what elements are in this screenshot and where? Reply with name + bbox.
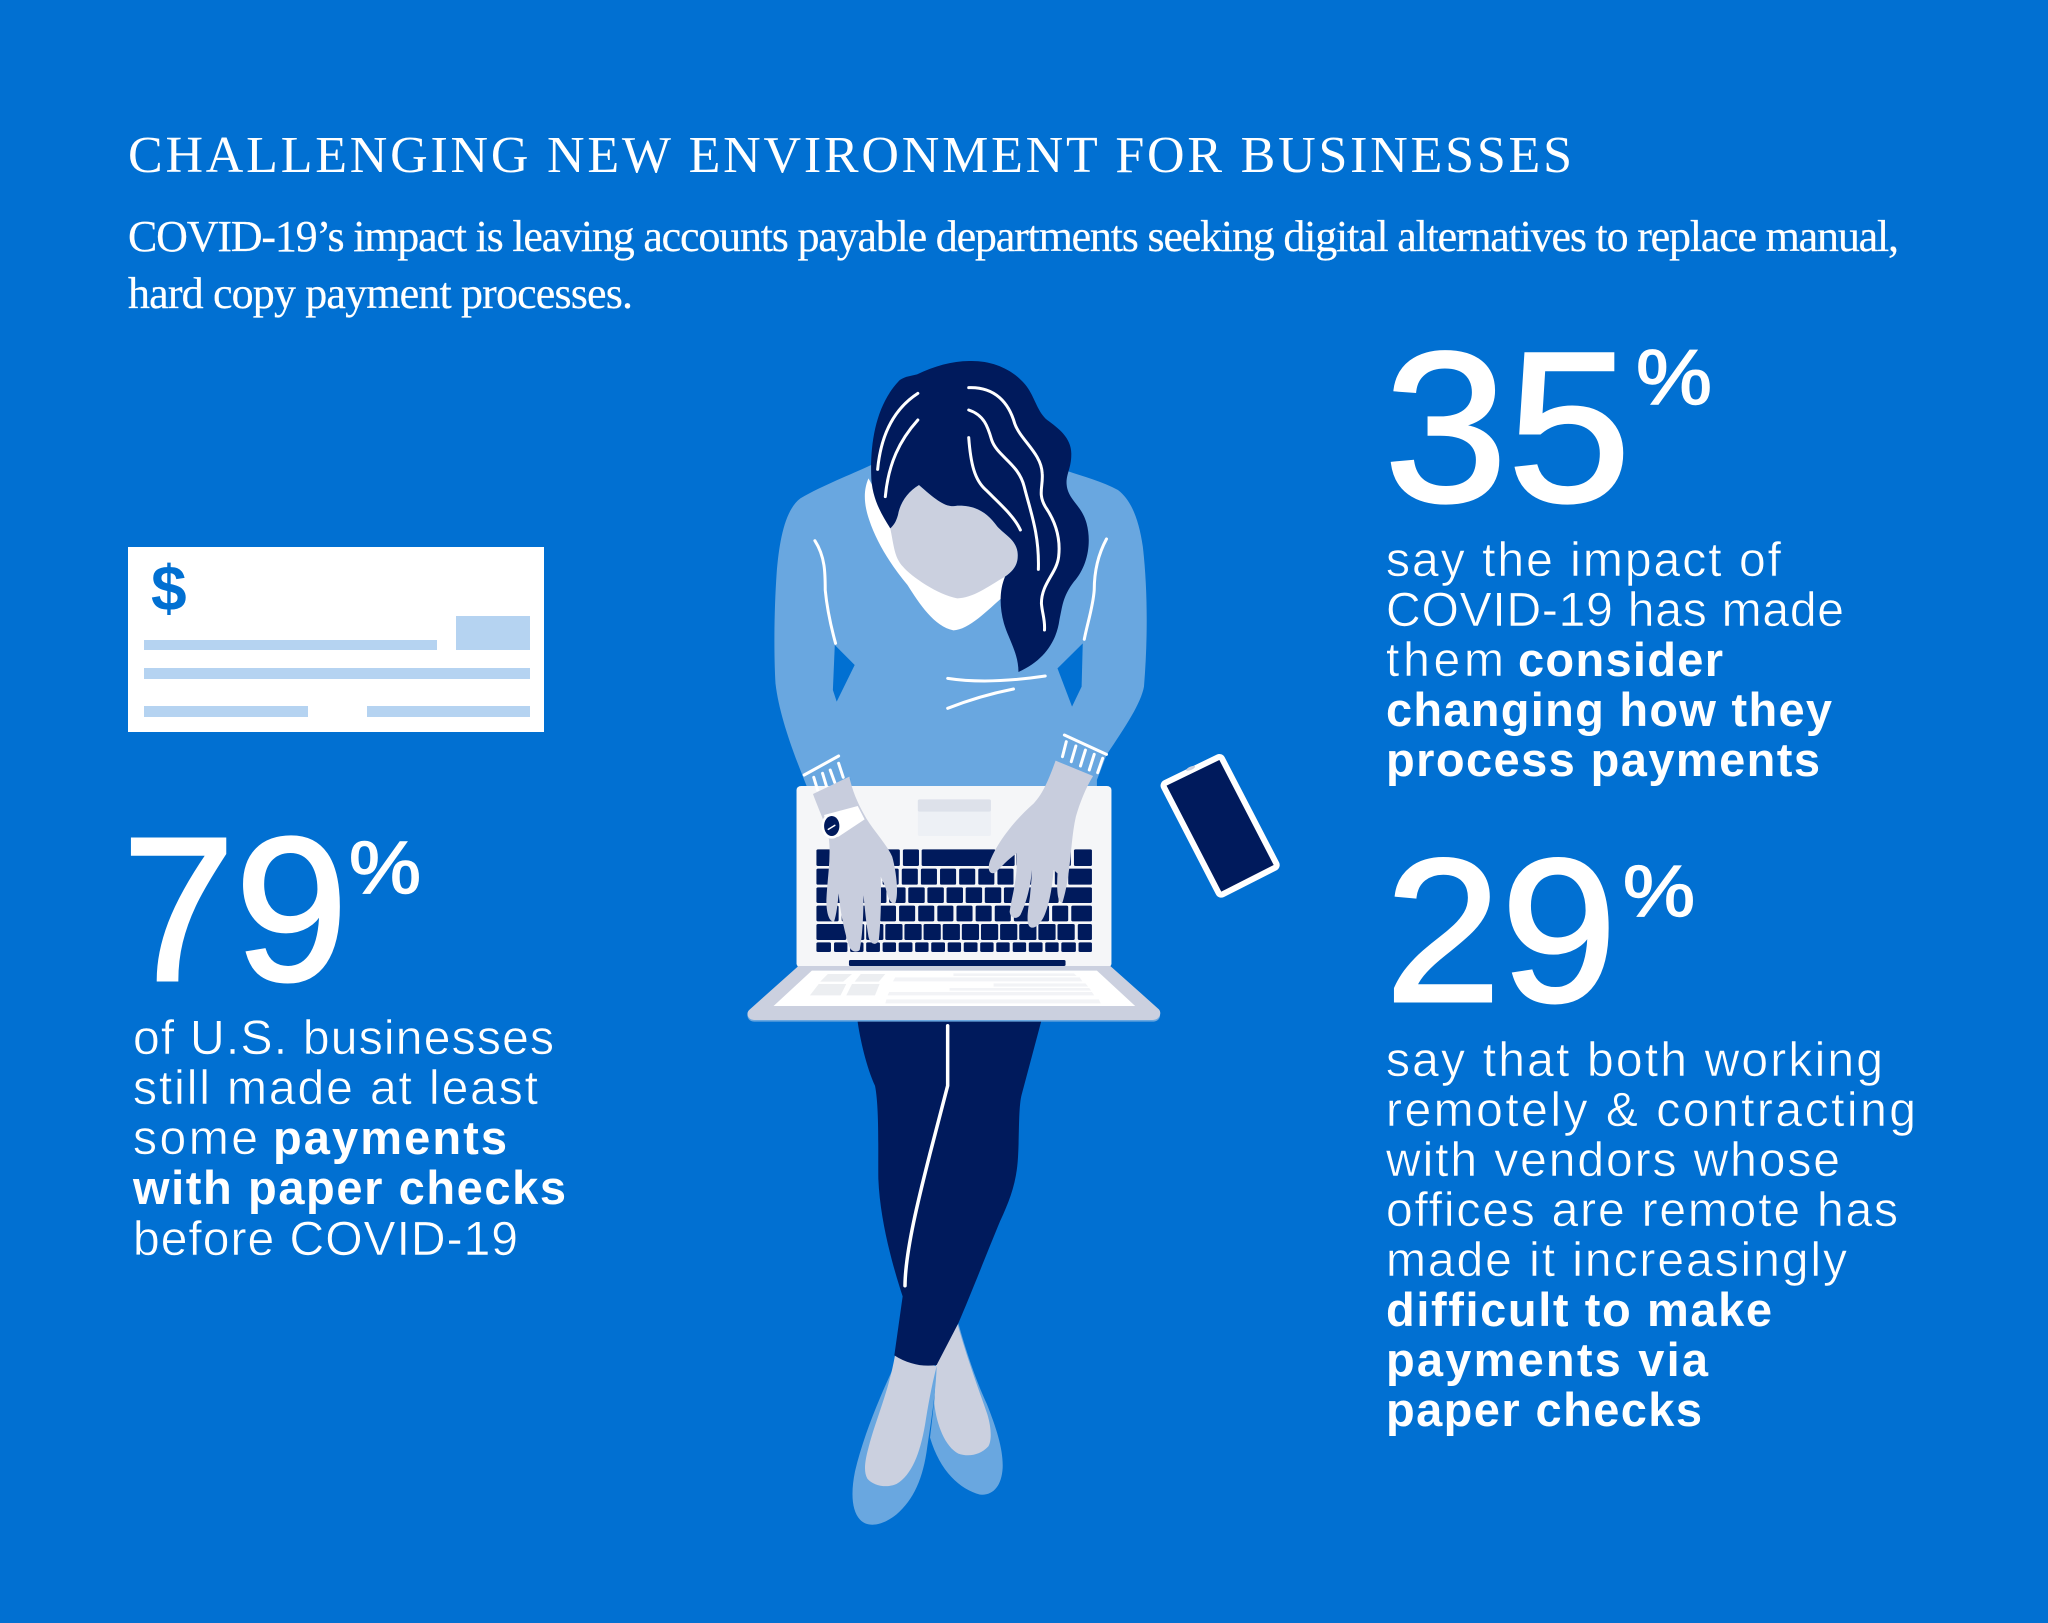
text: 35 percent description: them [1386,634,1504,687]
text: 29 percent description: payments via [1386,1333,1709,1386]
smartwatch [821,806,865,839]
text: 35 percent description: consider [1518,633,1723,686]
text: 29 percent description: remotely & contracting [1386,1084,1916,1137]
sweater [774,465,1147,794]
laptop base [797,786,1111,968]
text: 79 percent description: of U.S. businesses [133,1012,554,1065]
stat: 79 percent: 79 [122,795,348,1024]
text: 35 percent description: COVID-19 has made [1386,584,1844,637]
text: 29 percent description: made it increasingly [1386,1234,1847,1287]
text: 79 percent description: before COVID-19 [133,1213,518,1266]
text: 35 percent description: changing how they [1386,683,1832,736]
text: 29 percent description: offices are remote has [1386,1184,1898,1237]
text: 29 percent description: with vendors whose [1385,1134,1840,1187]
text: 29 percent description: difficult to make [1386,1283,1772,1336]
text: 35 percent description: say the impact of [1386,534,1782,587]
hair [871,361,1089,672]
text: 79 percent description [132,1012,566,1266]
phone [1167,760,1274,892]
text: 29 percent description: paper checks [1386,1383,1702,1436]
hair highlights [878,388,1059,630]
laptop screen [774,971,1135,1006]
laptop hinge [849,960,1066,966]
text: 35 percent description: process payments [1386,733,1820,786]
text: 79 percent description: some [133,1112,258,1165]
text: 29 percent description: say that both working [1386,1034,1883,1087]
stat: 29 percent: 29 [1385,817,1617,1045]
stat: 29 percent: % [1623,852,1695,932]
cuffs [804,735,1106,790]
left armpit gap [833,645,855,702]
text: 29 percent description [1385,1034,1916,1436]
text: 79 percent description: with paper checks [132,1161,566,1214]
text: 35 percent description [1386,534,1844,786]
laptop, hands and phone [747,735,1274,1022]
illustration: woman with laptop [747,361,1274,1525]
icon: paper check [128,547,544,732]
intro text [128,212,1899,318]
legs and feet [852,1020,1042,1525]
left hand [813,777,897,952]
stat: 35 percent: % [1636,333,1712,421]
intro text: hard copy payment processes. [128,269,633,318]
icon: paper check: $ [151,552,187,624]
laptop screen frame [747,966,1160,1020]
right hand [989,761,1093,928]
text: 79 percent description: payments [273,1111,507,1164]
right armpit gap [1057,643,1083,707]
stat: 79 percent: % [349,826,421,909]
title: CHALLENGING NEW ENVIRONMENT FOR BUSINESSES [128,127,1572,184]
face [890,485,1018,598]
keyboard [816,849,1092,952]
text: 79 percent description: still made at least [133,1062,538,1115]
sweater fold lines [815,539,1106,708]
intro text: COVID-19’s impact is leaving accounts payable departments seeking digital alternatives to replace manual, [128,212,1899,261]
laptop screen edge [747,1010,1160,1022]
stat: 35 percent: 35 [1384,308,1631,547]
touchpad [918,799,991,836]
collar [865,478,1005,630]
sweater and head [774,361,1147,794]
